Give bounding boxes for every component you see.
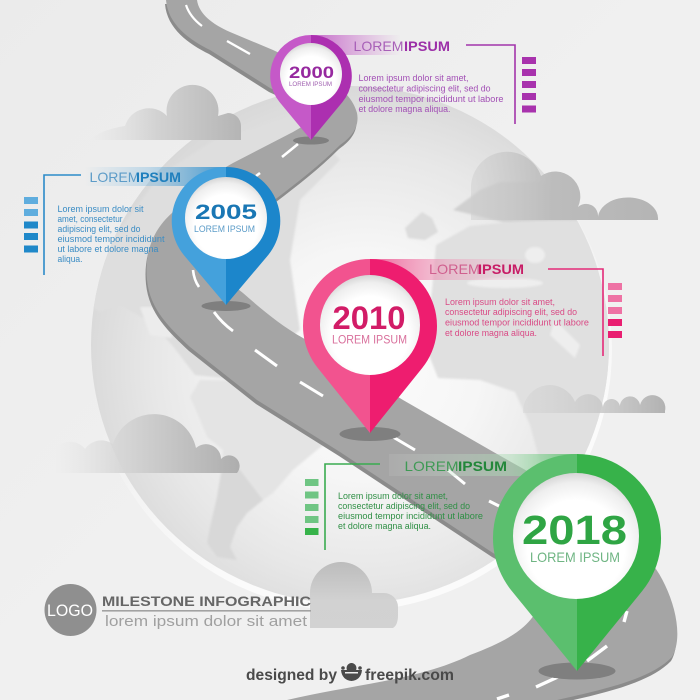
- pin 2005: [172, 167, 280, 305]
- heading 2000: IPSUM: [404, 38, 450, 54]
- heading 2018: LOREM: [404, 458, 458, 474]
- pin 2000: 2000: [289, 64, 334, 82]
- body text 2005: eiusmod tempor incididunt: [58, 234, 165, 244]
- cloud: top right: [471, 152, 658, 220]
- milestone 2000: [270, 35, 536, 144]
- heading 2005: [90, 169, 181, 185]
- cloud: bottom: [310, 562, 398, 628]
- body text 2005: ut labore et dolore magna: [58, 244, 159, 254]
- body text 2018: Lorem ipsum dolor sit amet,: [338, 491, 448, 501]
- body text 2010: Lorem ipsum dolor sit amet,: [445, 297, 555, 307]
- heading 2010: LOREM: [429, 261, 480, 277]
- bars 2010: [608, 283, 622, 338]
- body text 2000: et dolore magna aliqua.: [358, 104, 450, 114]
- bracket 2018: [325, 464, 380, 550]
- pin 2010: LOREM IPSUM: [332, 334, 407, 346]
- heading 2005: LOREM: [90, 169, 140, 185]
- band 2000: [311, 35, 401, 55]
- pin 2018: LOREM IPSUM: [530, 549, 620, 565]
- milestone 2005: [24, 167, 280, 311]
- body text 2018: consectetur adipiscing elit, sed do: [338, 501, 470, 511]
- cloud: lower left: [51, 414, 240, 473]
- heading 2010: IPSUM: [478, 261, 524, 277]
- pin 2005: LOREM IPSUM: [194, 224, 255, 234]
- pin 2010: [303, 259, 437, 433]
- pin shadow 2000: [293, 136, 329, 144]
- attribution: designed by: [246, 667, 337, 684]
- heading 2005: IPSUM: [136, 169, 181, 185]
- band 2005: [85, 167, 226, 186]
- bars 2005: [24, 197, 38, 252]
- bracket 2000: [466, 45, 515, 124]
- heading 2010: [429, 261, 524, 277]
- body text 2018: eiusmod tempor incididunt ut labore: [338, 511, 483, 521]
- globe: [88, 86, 620, 611]
- milestone 2018: [305, 454, 661, 680]
- bars 2000: [522, 57, 536, 112]
- icon: freepik crown: [341, 663, 362, 681]
- body text 2005: aliqua.: [58, 254, 82, 264]
- body text 2010: eiusmod tempor incididunt ut labore: [445, 318, 589, 328]
- heading 2018: [404, 458, 507, 474]
- band 2010: [370, 259, 530, 280]
- title block: [102, 593, 311, 630]
- pin 2000: [270, 35, 352, 140]
- title block: MILESTONE INFOGRAPHIC: [102, 593, 311, 609]
- body text 2000: consectetur adipiscing elit, sed do: [358, 84, 491, 94]
- body text 2005: Lorem ipsum dolor sit: [58, 204, 144, 214]
- pin shadow 2018: [538, 662, 616, 680]
- pin 2005: 2005: [195, 201, 257, 224]
- cloud: middle right: [523, 385, 665, 413]
- logo badge: [44, 584, 96, 636]
- cloud: top left: [90, 85, 241, 140]
- body text 2005: amet, consectetur: [58, 214, 123, 224]
- body text 2018: [338, 491, 483, 531]
- pin shadow 2010: [340, 427, 400, 441]
- body text 2010: et dolore magna aliqua.: [445, 328, 537, 338]
- attribution: [246, 663, 454, 684]
- band 2018: [389, 454, 577, 476]
- heading 2000: [354, 38, 450, 54]
- title block: lorem ipsum dolor sit amet: [105, 613, 308, 630]
- road centre dashes: [186, 5, 627, 699]
- road: [146, 0, 677, 700]
- pin shadow 2005: [202, 301, 250, 311]
- milestone 2010: [303, 259, 622, 441]
- body text 2010: [445, 297, 589, 338]
- pin 2000: LOREM IPSUM: [289, 81, 332, 88]
- logo badge: LOGO: [47, 601, 93, 620]
- bars 2018: [305, 479, 318, 535]
- pin 2018: [493, 454, 661, 671]
- attribution: freepik.com: [365, 667, 454, 684]
- heading 2018: IPSUM: [458, 458, 507, 474]
- heading 2000: LOREM: [354, 38, 404, 54]
- pin 2018: 2018: [522, 507, 627, 553]
- pin 2010: 2010: [332, 300, 406, 336]
- body text 2005: adipiscing elit, sed do: [58, 224, 141, 234]
- bracket 2005: [44, 175, 81, 275]
- body text 2010: consectetur adipiscing elit, sed do: [445, 307, 577, 317]
- body text 2005: [58, 204, 165, 264]
- body text 2000: eiusmod tempor incididunt ut labore: [358, 94, 504, 104]
- bracket 2010: [548, 269, 603, 356]
- body text 2000: Lorem ipsum dolor sit amet,: [358, 73, 468, 83]
- body text 2000: [358, 73, 504, 114]
- body text 2018: et dolore magna aliqua.: [338, 521, 431, 531]
